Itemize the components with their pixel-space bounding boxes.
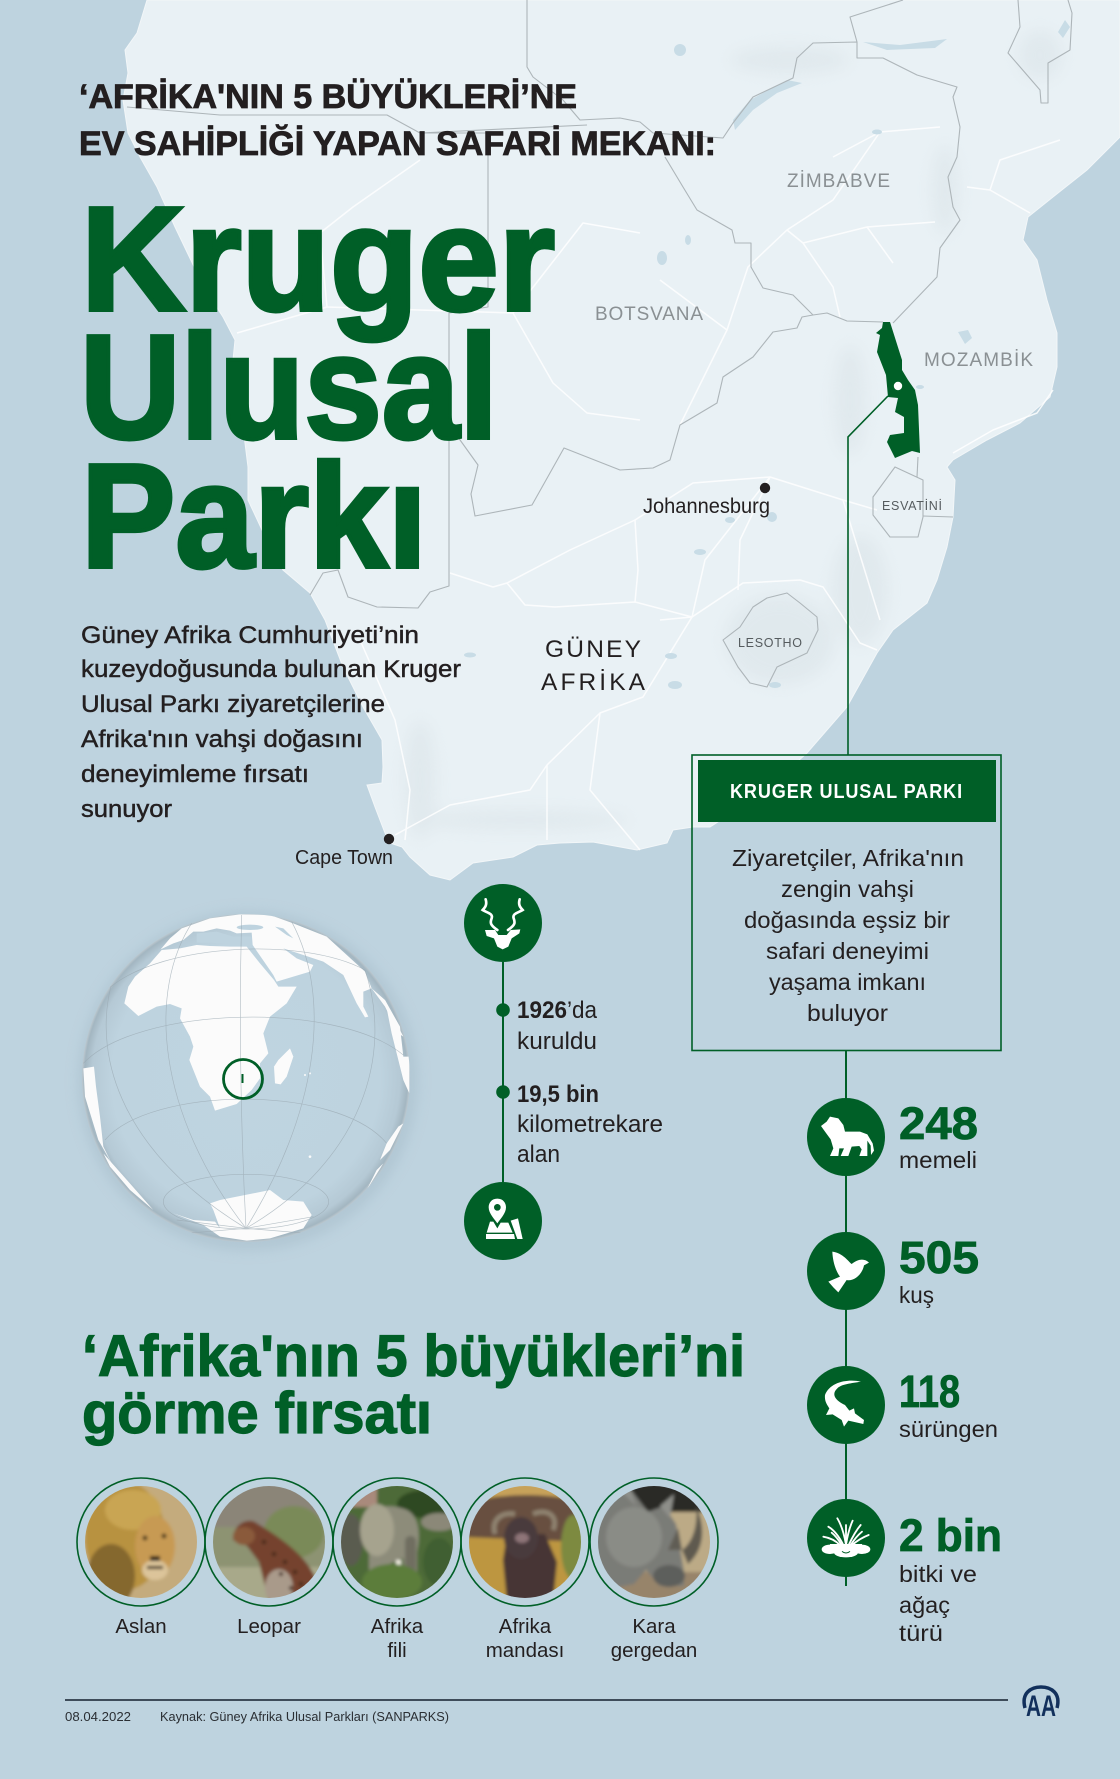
animal: buffalo — [461, 1478, 589, 1662]
wildlife stats column — [807, 1050, 1002, 1646]
footer — [65, 1687, 1058, 1724]
park mark on globe — [242, 1074, 244, 1083]
intro paragraph — [81, 622, 461, 823]
logo: AA: AA — [1026, 1690, 1056, 1723]
intro paragraph: Ulusal Parkı ziyaretçilerine — [81, 691, 385, 718]
main title: Kruger — [81, 177, 555, 342]
label: gergedan — [611, 1639, 697, 1662]
section heading: big five: ‘Afrika'nın 5 büyükleri’ni — [82, 1324, 745, 1389]
stat: reptiles: sürüngen — [899, 1416, 998, 1442]
park marker dot — [894, 382, 902, 390]
country labels: BOTSVANA — [595, 304, 703, 325]
callout header: KRUGER ULUSAL PARKI — [730, 781, 963, 803]
lakes — [464, 20, 1070, 689]
logo: AA — [1024, 1687, 1058, 1723]
fact: area 19.5 thousand km2 — [496, 1081, 663, 1168]
country borders — [127, 0, 1072, 687]
main title: Parkı — [81, 434, 427, 599]
city: Johannesburg — [643, 483, 770, 518]
globe inland seas — [197, 924, 294, 938]
fact: founded 1926 — [496, 997, 598, 1055]
section heading: big five: görme fırsatı — [82, 1381, 432, 1446]
country labels: ZİMBABVE — [787, 171, 890, 192]
stat: plants: ağaç — [899, 1592, 950, 1618]
main title — [80, 177, 555, 599]
city: Cape Town: Cape Town — [295, 847, 393, 869]
label: Afrika — [371, 1615, 424, 1638]
roads — [237, 127, 1060, 850]
leader line from park to box — [848, 396, 888, 755]
city: Cape Town — [295, 834, 394, 869]
callout text: doğasında eşsiz bir — [744, 907, 950, 933]
stat: birds: kuş — [899, 1282, 934, 1308]
section heading: big five — [82, 1324, 745, 1446]
label: Kara — [632, 1615, 676, 1638]
map: southern Africa — [123, 0, 1120, 880]
label: Afrika — [499, 1615, 552, 1638]
date: 08.04.2022 — [65, 1709, 131, 1724]
city: Johannesburg: Johannesburg — [643, 495, 770, 518]
icon: plant — [822, 1518, 870, 1557]
intro paragraph: sunuyor — [81, 796, 172, 823]
stat: plants: bitki ve — [899, 1561, 977, 1587]
stat: plants: türü — [899, 1620, 943, 1646]
fact: area 19.5 thousand km2: 19,5 bin — [517, 1081, 599, 1108]
globe locator — [78, 911, 418, 1251]
label: mandası — [486, 1639, 564, 1662]
animal: elephant — [333, 1478, 461, 1662]
animal: lion — [77, 1478, 205, 1638]
callout text: Ziyaretçiler, Afrika'nın — [732, 845, 964, 871]
icon: bird — [828, 1252, 869, 1292]
icon: map pin — [464, 1182, 542, 1260]
kicker heading: ‘AFRİKA'NIN 5 BÜYÜKLERİ’NE — [79, 78, 577, 116]
fact: founded 1926: kuruldu — [517, 1028, 597, 1055]
icon: lion — [821, 1117, 874, 1156]
timeline: park facts — [464, 884, 663, 1260]
Kruger park shape — [876, 322, 920, 458]
stat: birds — [807, 1232, 979, 1310]
animal: leopard — [205, 1478, 333, 1638]
intro paragraph: deneyimleme fırsatı — [81, 761, 309, 788]
animal: rhinoceros — [590, 1478, 718, 1662]
kicker heading — [79, 78, 716, 163]
stat: mammals: memeli — [899, 1147, 977, 1173]
callout box: Kruger Ulusal Parkı — [692, 755, 1001, 1050]
globe land masses — [83, 914, 409, 1241]
stat: plants: 2 bin — [899, 1510, 1002, 1561]
callout header — [698, 760, 996, 822]
fact: founded 1926: 1926’da — [517, 997, 598, 1024]
South Africa label: AFRİKA — [541, 669, 646, 696]
callout text: safari deneyimi — [766, 938, 929, 964]
fact: area 19.5 thousand km2: alan — [517, 1141, 560, 1168]
main title: Ulusal — [80, 305, 498, 470]
country labels — [595, 171, 1033, 371]
intro paragraph: kuzeydoğusunda bulunan Kruger — [81, 656, 461, 683]
relief shading — [404, 30, 1062, 840]
icon: crocodile — [825, 1381, 864, 1427]
stat: mammals — [807, 1098, 978, 1176]
kicker heading: EV SAHİPLİĞİ YAPAN SAFARİ MEKANI: — [79, 125, 716, 163]
callout text: zengin vahşi — [781, 876, 914, 902]
stat: reptiles: 118 — [899, 1366, 960, 1417]
South Africa label: GÜNEY — [545, 636, 641, 663]
source: Kaynak: Güney Afrika Ulusal Parkları (SANPARKS) — [160, 1709, 449, 1724]
callout text: buluyor — [807, 1000, 888, 1026]
small country labels — [738, 499, 942, 650]
stat: plants — [807, 1499, 1002, 1646]
country labels: MOZAMBİK — [924, 350, 1033, 371]
locator ring — [224, 1060, 262, 1098]
intro paragraph: Afrika'nın vahşi doğasını — [81, 726, 363, 753]
graticule — [83, 915, 403, 1233]
stat: birds: 505 — [899, 1232, 979, 1283]
fact: area 19.5 thousand km2: kilometrekare — [517, 1111, 663, 1138]
label: fili — [387, 1639, 407, 1662]
small country labels: LESOTHO — [738, 636, 802, 650]
callout text: yaşama imkanı — [769, 969, 926, 995]
South Africa label — [541, 636, 646, 696]
label: Aslan — [115, 1615, 167, 1638]
stat: reptiles — [807, 1366, 998, 1444]
icon: kudu head — [464, 884, 542, 962]
small country labels: ESVATİNİ — [882, 499, 942, 513]
stat: mammals: 248 — [899, 1098, 978, 1149]
land — [123, 0, 1120, 880]
label: Leopar — [237, 1615, 301, 1638]
callout text — [732, 845, 964, 1026]
intro paragraph: Güney Afrika Cumhuriyeti’nin — [81, 622, 419, 649]
